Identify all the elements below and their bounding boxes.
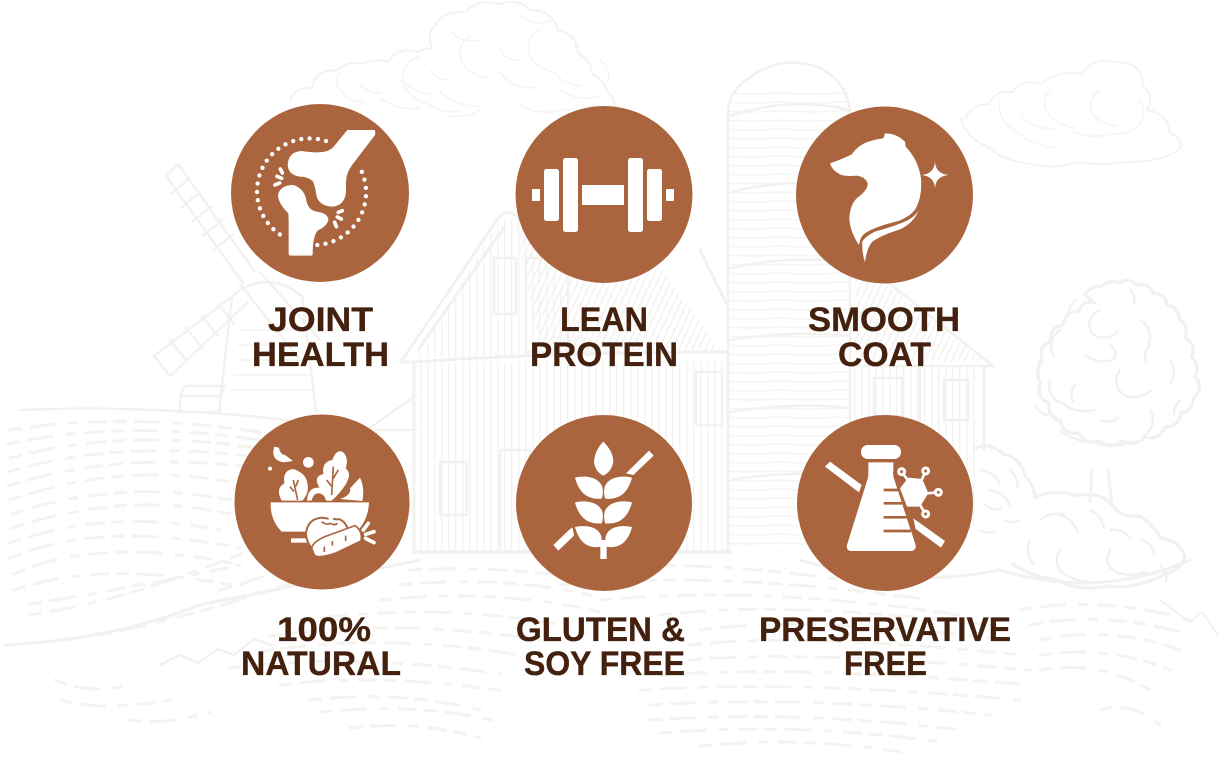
- badge: gluten circle: [516, 415, 692, 591]
- panel: natural: [234, 414, 410, 683]
- windmill: [154, 164, 320, 412]
- label: gluten and soy free: SOY FREE: [524, 645, 685, 683]
- panel: joint health: [231, 104, 409, 374]
- icon: dumbbell: [532, 158, 674, 232]
- badge: joint circle: [231, 104, 409, 282]
- barn wing on right: [850, 252, 993, 526]
- panel: preservative free: [759, 415, 1011, 683]
- left field: [5, 409, 420, 721]
- barn: [367, 212, 730, 554]
- panel: smooth coat: [796, 106, 973, 374]
- label: preservative free: FREE: [844, 645, 927, 683]
- label: smooth coat: SMOOTH: [808, 301, 960, 339]
- silo: [728, 62, 850, 552]
- label: smooth coat: COAT: [838, 336, 931, 374]
- icon: flask and molecule with slash: [825, 445, 945, 551]
- lower fields: [230, 560, 1217, 752]
- badge: protein circle: [516, 106, 692, 283]
- label: lean protein: PROTEIN: [530, 336, 678, 374]
- panel: lean protein: [516, 106, 692, 374]
- label: natural: 100%: [277, 611, 371, 649]
- cloud: top centre: [290, 2, 614, 116]
- bushes: [975, 446, 1185, 588]
- label: joint health: HEALTH: [252, 336, 389, 374]
- label: gluten and soy free: GLUTEN &: [516, 611, 685, 649]
- badge: preservative circle: [797, 415, 973, 591]
- badge: natural circle: [234, 414, 410, 590]
- badge: coat circle: [796, 106, 973, 284]
- icon: salad bowl with apple and carrot: [268, 447, 374, 557]
- tree: [1035, 280, 1200, 505]
- label: joint health: JOINT: [268, 301, 373, 339]
- cloud: top right: [961, 60, 1181, 167]
- panel: gluten and soy free: [516, 415, 692, 683]
- label: preservative free: PRESERVATIVE: [759, 611, 1011, 649]
- icon: wheat with slash: [553, 442, 654, 559]
- icon: dog with sparkle: [830, 133, 948, 262]
- label: natural: NATURAL: [241, 645, 401, 683]
- label: lean protein: LEAN: [560, 301, 648, 339]
- icon: joint bones: [257, 130, 375, 256]
